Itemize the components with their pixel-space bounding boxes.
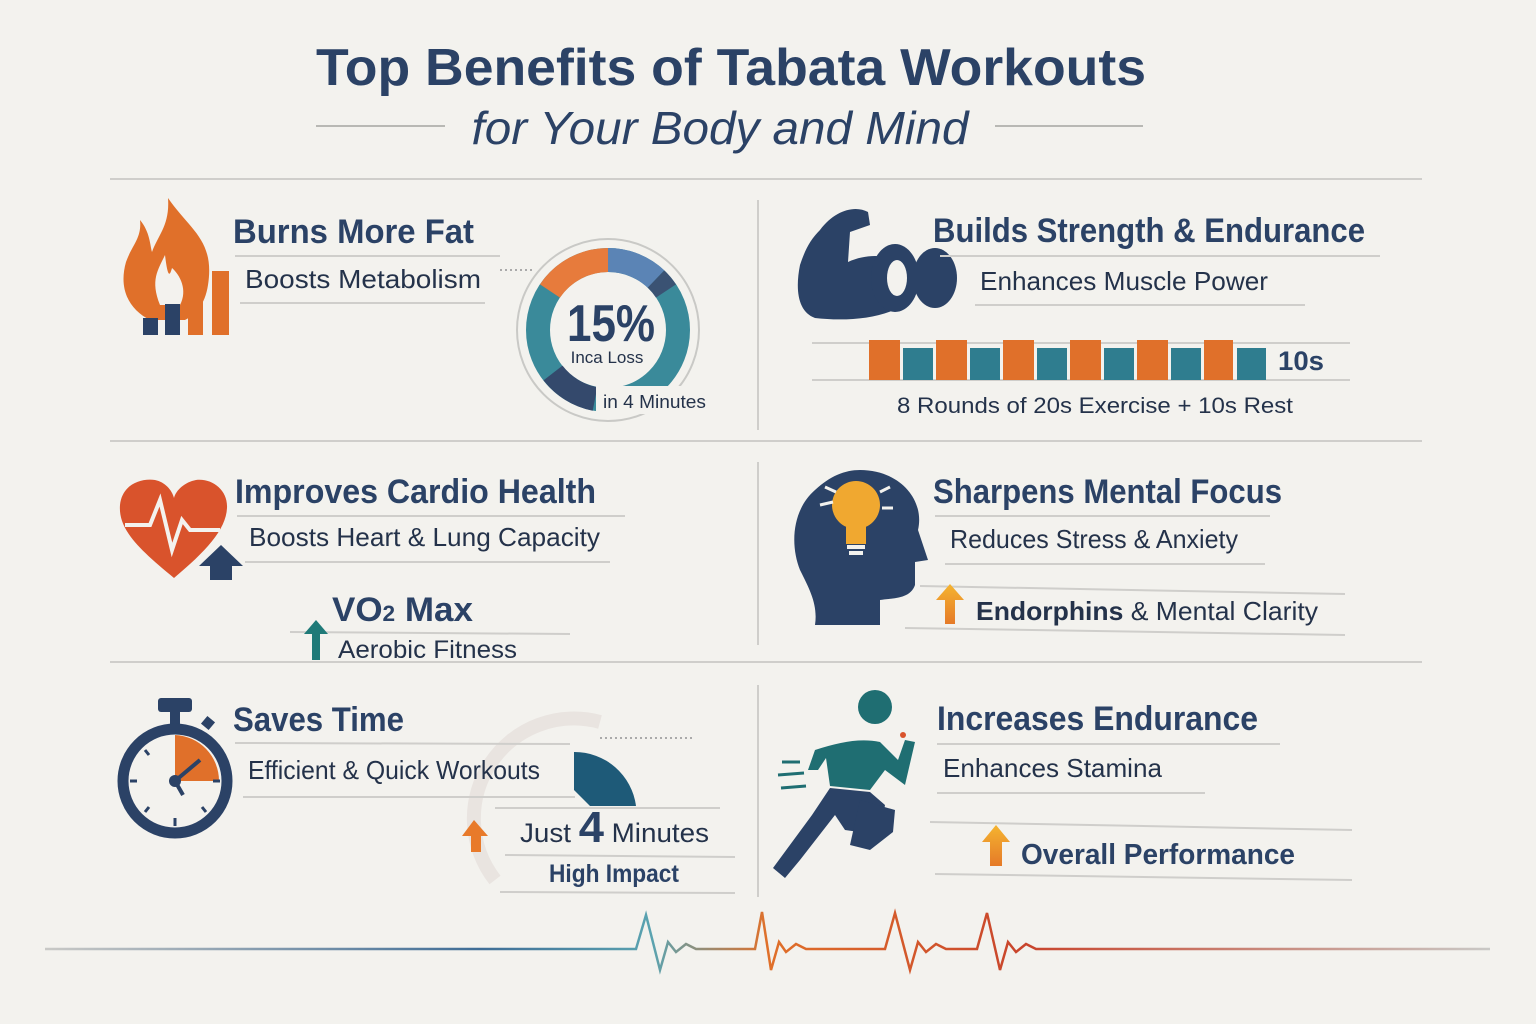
donut chart: in 4 Minutes bbox=[603, 392, 706, 412]
panel: builds strength bbox=[798, 209, 1380, 418]
panel: cardio health bbox=[120, 473, 625, 664]
subheading: Boosts Heart & Lung Capacity bbox=[249, 522, 600, 552]
icon: flexed arm with dumbbell bbox=[798, 209, 957, 319]
icon: stopwatch bbox=[123, 698, 227, 833]
callout: just 4 minutes: High Impact bbox=[549, 860, 680, 888]
icon: heart with pulse bbox=[120, 480, 243, 580]
heading: Sharpens Mental Focus bbox=[933, 473, 1282, 511]
panel: burns more fat bbox=[123, 198, 714, 421]
callout: VO2 max: VO2 Max bbox=[332, 591, 473, 629]
heading: Saves Time bbox=[233, 701, 404, 739]
icon: runner bbox=[773, 690, 915, 878]
callout: just 4 minutes bbox=[462, 752, 735, 893]
subtitle: for Your Body and Mind bbox=[472, 102, 970, 154]
panel: mental focus bbox=[794, 470, 1345, 635]
callout: endorphins: Endorphins & Mental Clarity bbox=[976, 596, 1318, 626]
callout: VO2 max bbox=[290, 591, 570, 664]
subheading: Enhances Muscle Power bbox=[980, 266, 1268, 296]
interval bar chart bbox=[812, 340, 1350, 418]
subheading: Enhances Stamina bbox=[943, 753, 1163, 783]
callout: overall performance bbox=[930, 822, 1352, 880]
interval bar chart: 8 Rounds of 20s Exercise + 10s Rest bbox=[897, 393, 1293, 418]
panel: increases endurance bbox=[773, 690, 1352, 880]
ecg line bbox=[45, 912, 1490, 970]
donut chart: 15% bbox=[567, 295, 655, 353]
interval bar chart: 10s bbox=[1278, 346, 1324, 376]
heading: Increases Endurance bbox=[937, 700, 1258, 738]
subheading: Efficient & Quick Workouts bbox=[248, 755, 540, 785]
callout: endorphins bbox=[905, 584, 1345, 635]
title: Top Benefits of Tabata Workouts bbox=[316, 39, 1146, 97]
heading: Burns More Fat bbox=[233, 213, 474, 251]
donut chart bbox=[517, 239, 714, 421]
decorative faint arc bbox=[474, 719, 600, 880]
heading: Improves Cardio Health bbox=[235, 473, 596, 511]
callout: VO2 max: Aerobic Fitness bbox=[338, 636, 517, 664]
subheading: Boosts Metabolism bbox=[245, 264, 481, 294]
icon: flame with bars bbox=[123, 198, 229, 335]
donut chart: Inca Loss bbox=[571, 348, 643, 367]
callout: overall performance: Overall Performance bbox=[1021, 839, 1295, 871]
icon: head with lightbulb bbox=[794, 470, 928, 625]
subheading: Reduces Stress & Anxiety bbox=[950, 524, 1238, 554]
heading: Builds Strength & Endurance bbox=[933, 212, 1365, 250]
callout: just 4 minutes: Just 4 Minutes bbox=[520, 803, 709, 852]
panel: saves time bbox=[123, 698, 735, 893]
